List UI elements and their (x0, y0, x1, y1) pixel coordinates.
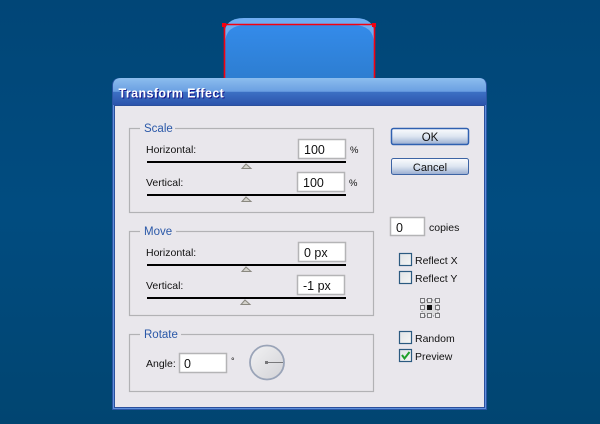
dialog window: Transform Effect (112, 78, 487, 410)
icon: reference point grid (420, 298, 440, 318)
panel: scale (130, 122, 374, 212)
checkbox: Reflect X (400, 254, 458, 267)
dialog body (114, 106, 484, 408)
panel: scale: Scale (144, 123, 173, 135)
panel: rotate: 0 (184, 357, 191, 371)
panel: scale: Horizontal: (146, 144, 196, 156)
checkbox: Random: Random (415, 333, 455, 345)
button: Cancel: Cancel (413, 162, 447, 174)
panel: scale: 100 (304, 143, 325, 157)
panel: move (130, 225, 374, 316)
panel: move: 0 px (304, 246, 328, 260)
panel: move: Horizontal: (146, 247, 196, 259)
panel: rotate (130, 328, 374, 392)
checkbox: Preview (checked): Preview (415, 351, 453, 363)
checkbox: Preview (checked) (400, 350, 453, 363)
checkbox: Reflect X: Reflect X (415, 255, 458, 267)
panel: scale: Vertical: (146, 177, 183, 189)
dial (250, 346, 284, 380)
copies field (390, 218, 459, 236)
copies field: copies (429, 222, 459, 234)
title bar (113, 78, 486, 105)
panel: move: -1 px (303, 279, 332, 293)
panel: move: Vertical: (146, 280, 183, 292)
title text shadow: Transform Effect (120, 88, 226, 102)
checkbox: Reflect Y (400, 272, 457, 285)
panel: rotate: ° (231, 356, 235, 366)
panel: rotate: Angle: (146, 358, 176, 370)
panel: move: Move (144, 226, 172, 238)
button: OK (392, 128, 468, 144)
button: OK: OK (422, 132, 439, 144)
panel: scale: % (349, 178, 358, 189)
checkbox: Random (400, 332, 455, 345)
panel: rotate: Rotate (144, 329, 178, 341)
panel: scale: % (350, 145, 359, 156)
blue rounded shape with red selection (222, 18, 376, 80)
button: Cancel (392, 158, 468, 174)
panel: scale: 100 (303, 176, 324, 190)
checkbox: Reflect Y: Reflect Y (415, 273, 457, 285)
title: Transform Effect (118, 86, 225, 100)
copies field: 0 (396, 221, 403, 235)
